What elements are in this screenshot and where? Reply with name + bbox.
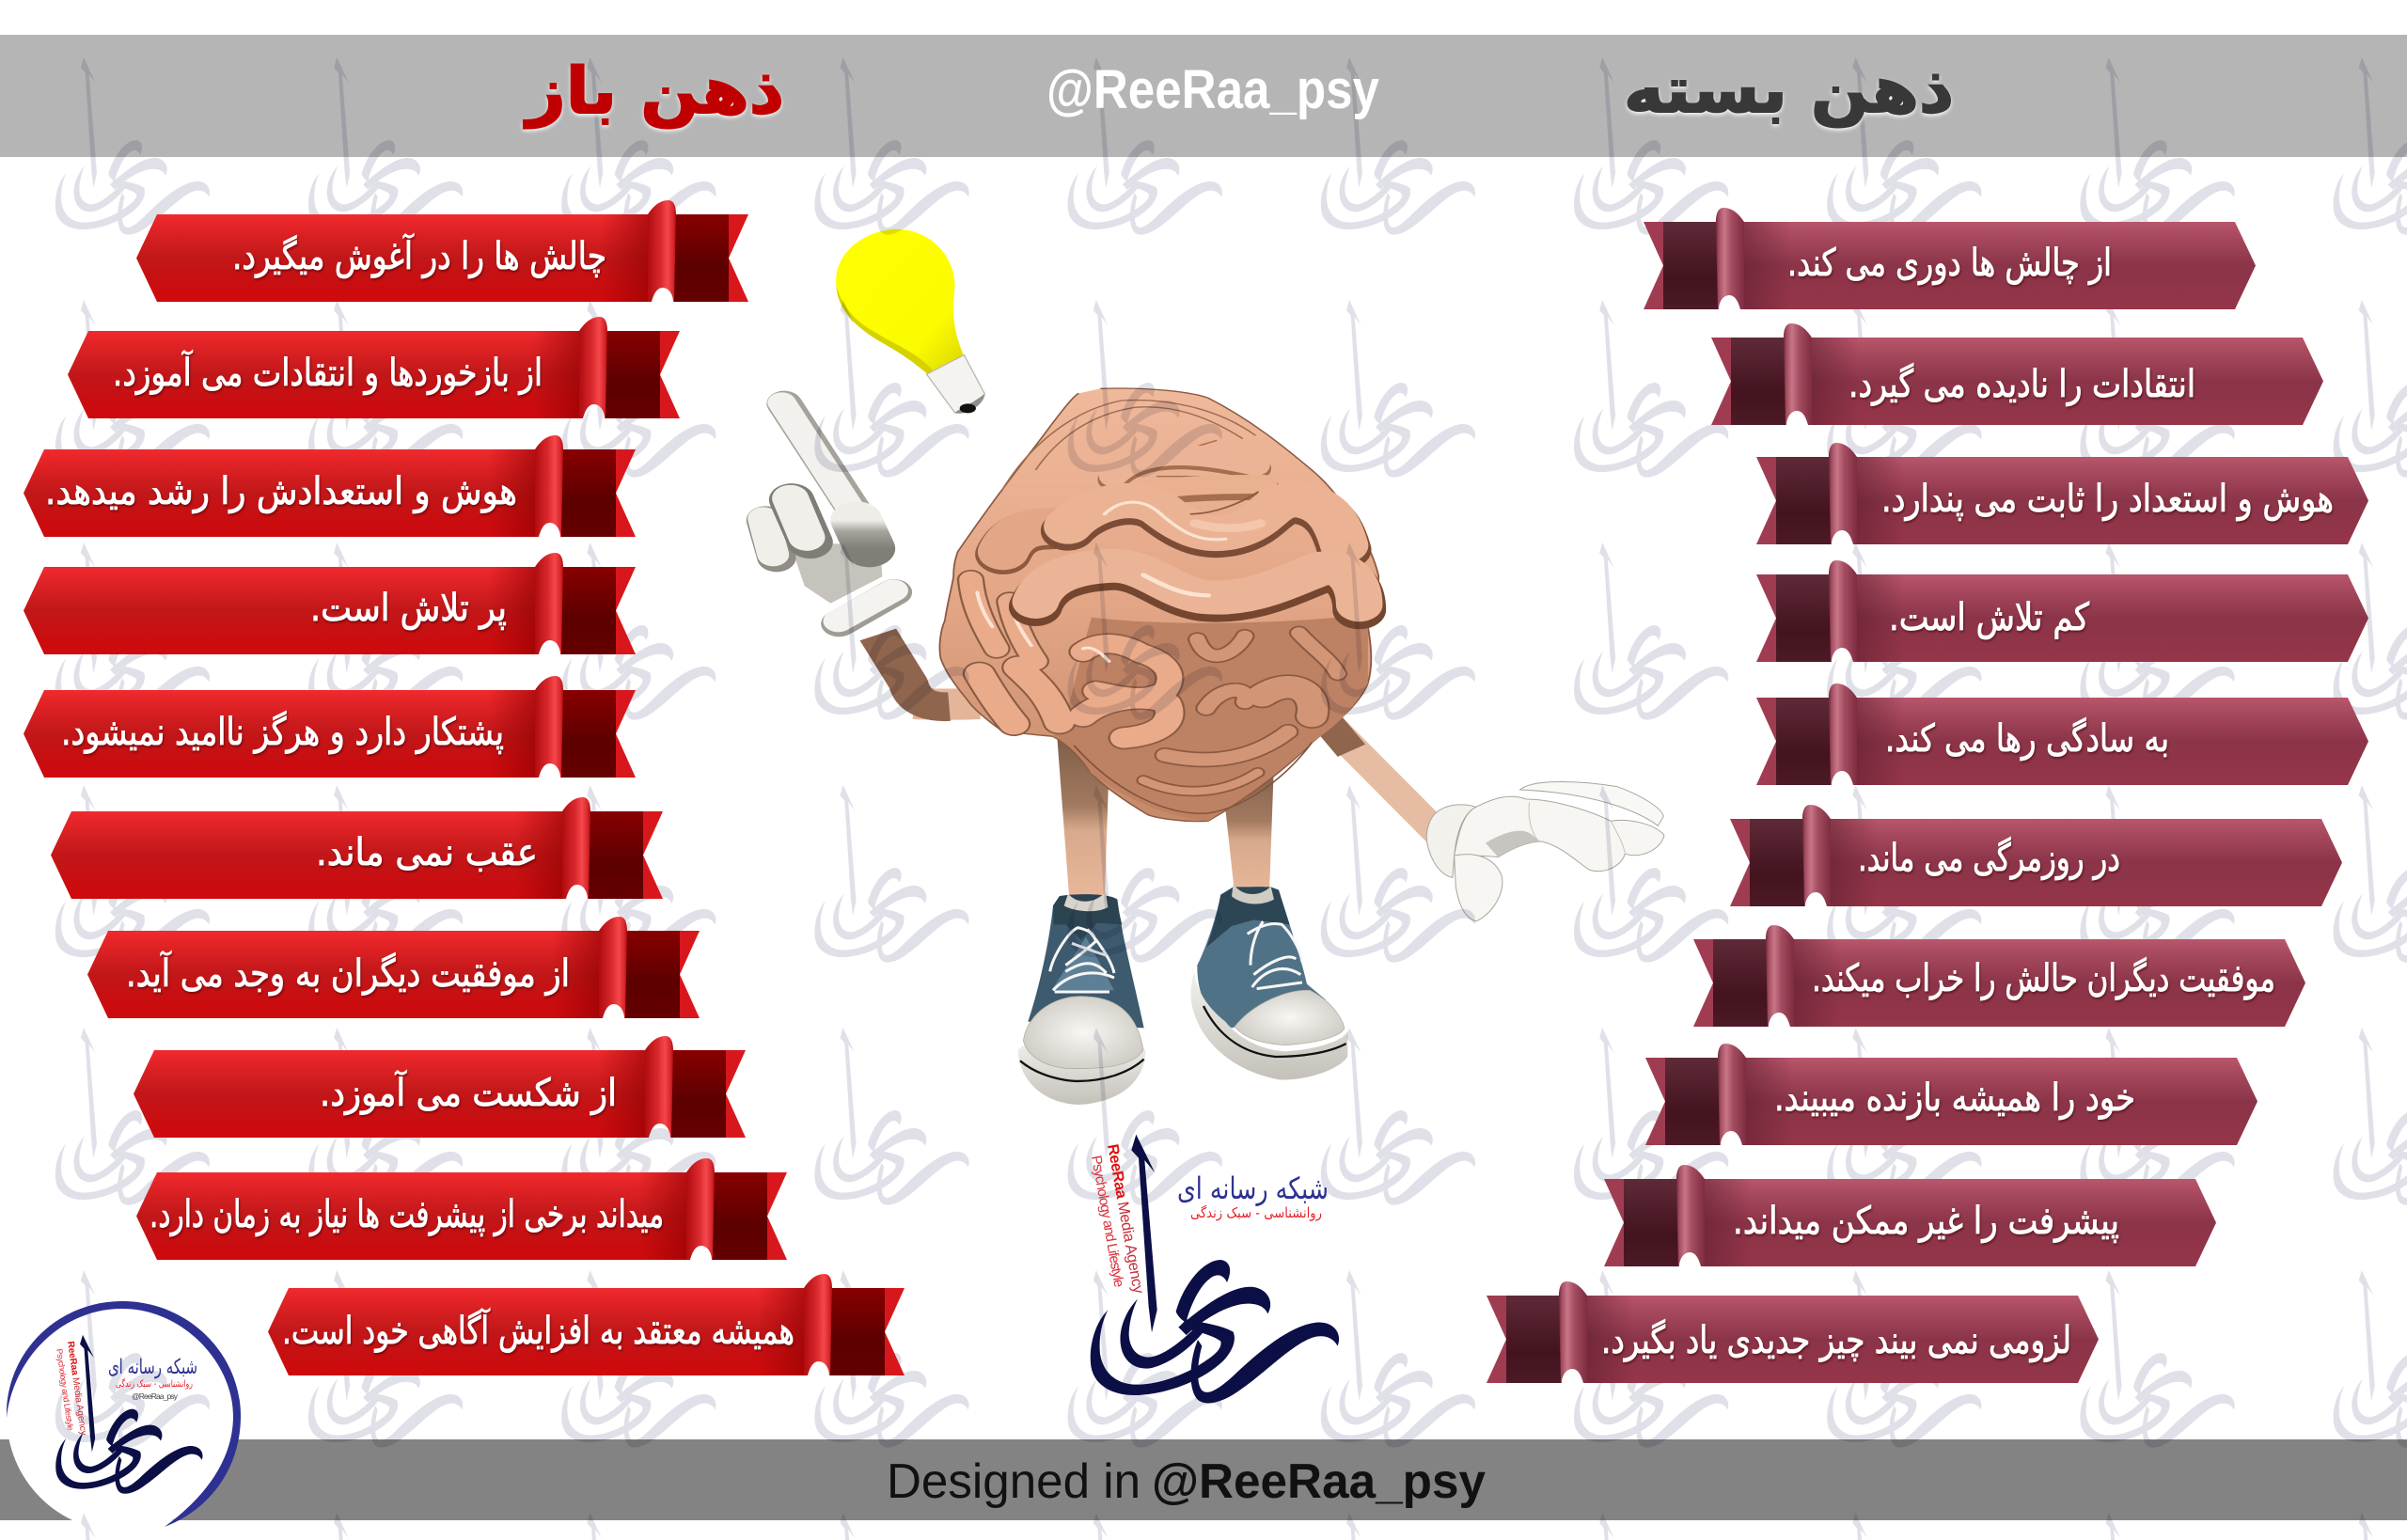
central logo: روانشناسی - سبک زندگی (1190, 1204, 1322, 1221)
top header band (0, 35, 2407, 157)
ribbon 10 (1487, 1281, 2099, 1383)
ribbon 2 (68, 317, 680, 418)
circular logo badge: شبکه رسانه ای (108, 1356, 197, 1379)
ribbon 1: چالش ها را در آغوش میگیرد. (232, 233, 606, 278)
ribbon 2 (1711, 323, 2323, 425)
white disc of circular badge (7, 1300, 238, 1532)
circular logo badge (7, 1301, 241, 1527)
ribbon 5 (1756, 684, 2368, 785)
left sneaker (1018, 891, 1145, 1105)
footer credit (887, 1454, 1486, 1509)
ribbon 1 (1644, 208, 2256, 309)
ribbon 10 (268, 1274, 905, 1375)
ribbon 6: عقب نمی ماند. (316, 831, 538, 874)
heading: open mind: ذهن باز (524, 55, 784, 129)
ribbon 8: خود را همیشه بازنده میبیند. (1774, 1076, 2135, 1120)
illustration: brain character with light bulb (763, 229, 1664, 1105)
ribbon 9: پیشرفت را غیر ممکن میداند. (1733, 1200, 2119, 1243)
ribbon 3: هوش و استعداد را ثابت می پندارد. (1881, 478, 2334, 521)
ribbon 9 (1604, 1165, 2216, 1266)
ribbon 6 (1730, 805, 2342, 906)
ribbon 4: پر تلاش است. (310, 587, 507, 630)
ribbon 5: پشتکار دارد و هرگز ناامید نمیشود. (61, 711, 504, 754)
circular logo badge: روانشناسی - سبک زندگی (116, 1378, 193, 1390)
ribbon 3 (1756, 443, 2368, 544)
left arm (878, 635, 980, 707)
ribbon 2: انتقادات را نادیده می گیرد. (1849, 363, 2195, 406)
ribbon 3 (24, 435, 636, 537)
ribbon 2: از بازخوردها و انتقادات می آموزد. (113, 350, 543, 395)
panel: closed mind ribbons (1487, 208, 2368, 1383)
ribbon 8 (1645, 1044, 2258, 1145)
ribbon 1 (136, 200, 748, 302)
footer text: handle: @ReeRaa_psy (1152, 1454, 1486, 1509)
brain with arms and left glove (763, 388, 1441, 837)
central logo: ReeRaa Media Agency (1104, 1143, 1147, 1296)
panel: open mind ribbons (24, 200, 905, 1375)
brain (939, 388, 1378, 822)
ribbon 9: میداند برخی از پیشرفت ها نیاز به زمان دارد. (149, 1193, 664, 1236)
circular logo badge: Psychology and Lifestyle (55, 1348, 75, 1431)
right sneaker (1191, 884, 1347, 1079)
ribbon 5: به سادگی رها می کند. (1885, 717, 2169, 761)
ribbon 6 (51, 797, 663, 899)
right arm (1329, 724, 1441, 837)
ribbon 8: از شکست می آموزد. (320, 1070, 617, 1115)
ribbon 7 (87, 917, 700, 1018)
footer text: designed in: Designed in (887, 1454, 1141, 1509)
ribbon 7: موفقیت دیگران حالش را خراب میکند. (1812, 957, 2275, 1000)
ribbon 3: هوش و استعدادش را رشد میدهد. (45, 470, 517, 513)
ribbon 9 (136, 1158, 787, 1260)
circular logo badge: ReeRaa Media Agency (65, 1341, 88, 1436)
central logo: Psychology and Lifestyle (1088, 1155, 1126, 1289)
ribbon 4: کم تلاش است. (1889, 596, 2090, 639)
central logo: شبکه رسانه ای (1177, 1171, 1329, 1206)
left glove (763, 402, 894, 623)
ribbon 8 (134, 1036, 746, 1138)
ribbon 10: لزومی نمی بیند چیز جدیدی یاد بگیرد. (1601, 1319, 2071, 1362)
ribbon 7 (1693, 925, 2305, 1027)
icon: light bulb (836, 229, 984, 413)
left and right legs (1057, 733, 1274, 895)
ribbon 10: همیشه معتقد به افزایش آگاهی خود است. (282, 1308, 794, 1353)
heading: closed mind: ذهن بسته (1624, 54, 1954, 128)
right glove (1426, 781, 1664, 921)
central logo (1088, 1135, 1339, 1403)
heading: channel handle: @ReeRaa_psy (1046, 59, 1379, 120)
ribbon 6: در روزمرگی می ماند. (1858, 837, 2120, 880)
ribbon 5 (24, 676, 636, 778)
circular logo badge: @ReeRaa_psy (132, 1391, 179, 1401)
ribbon 4 (1756, 560, 2368, 662)
ribbon 7: از موفقیت دیگران به وجد می آید. (126, 951, 570, 996)
bottom footer band (0, 1439, 2407, 1520)
ribbon 1: از چالش ها دوری می کند. (1787, 242, 2112, 285)
ribbon 4 (24, 553, 636, 654)
